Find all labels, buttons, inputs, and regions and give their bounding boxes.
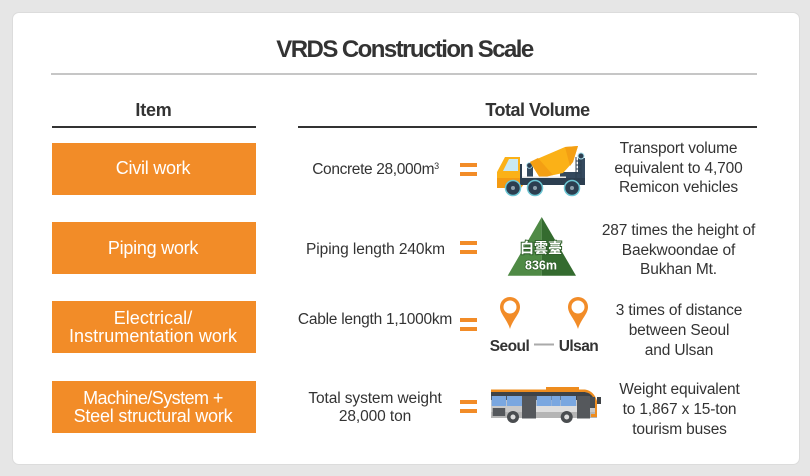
description: transport volume: [614, 140, 743, 196]
description: height of Baekwoondae: Bukhan Mt.: [640, 261, 717, 278]
item: piping work: [52, 222, 256, 274]
description: distance between Seoul and Ulsan: [616, 302, 742, 359]
description: distance between Seoul and Ulsan: between Seoul: [629, 322, 729, 339]
description: weight of buses: [619, 381, 740, 438]
description: transport volume: Remicon vehicles: [619, 179, 738, 196]
volume: cable length: Cable length 1,1000km: [298, 311, 452, 328]
icon: concrete mixer truck: [497, 146, 585, 196]
equals sign row 3: [460, 318, 477, 331]
volume: total system weight: Total system weight: [308, 390, 442, 407]
icon: tourism bus: [491, 387, 601, 423]
description: transport volume: Transport volume: [620, 140, 737, 157]
item: electrical and instrumentation work: [52, 301, 256, 353]
equals sign row 4: [460, 400, 477, 413]
description: weight of buses: Weight equivalent: [619, 381, 740, 398]
column heading: total volume: Total Volume: [485, 100, 590, 120]
volume: total system weight: 28,000 ton: [339, 408, 411, 425]
description: transport volume: equivalent to 4,700: [614, 160, 743, 177]
column heading: item: Item: [135, 100, 172, 120]
volume: concrete: Concrete 28,000m3: [312, 161, 439, 178]
description: distance between Seoul and Ulsan: and Ulsan: [645, 342, 713, 359]
equals sign row 1: [460, 163, 477, 176]
description: weight of buses: tourism buses: [632, 421, 727, 438]
icon: Baekwoondae mountain: [508, 217, 576, 276]
equals sign row 2: [460, 241, 477, 254]
item: civil work: [52, 143, 256, 195]
description: distance between Seoul and Ulsan: 3 times of distance: [616, 302, 742, 319]
item: civil work: Civil work: [116, 158, 190, 178]
icon: Seoul to Ulsan location pins: Seoul: [490, 338, 529, 355]
item: piping work: Piping work: [108, 238, 198, 258]
item: machine, system and steel structural work: [52, 381, 256, 433]
item: electrical and instrumentation work: Electrical/: [114, 308, 192, 328]
icon: Seoul to Ulsan location pins: Ulsan: [559, 338, 598, 355]
icon: Baekwoondae mountain: 白雲臺: [520, 240, 562, 256]
volume: total system weight: [308, 390, 442, 425]
title: VRDS Construction Scale: [276, 36, 533, 63]
volume: piping length: Piping length 240km: [306, 241, 445, 258]
item: electrical and instrumentation work: Instrumentation work: [69, 326, 237, 346]
description: height of Baekwoondae: Baekwoondae of: [622, 242, 735, 259]
icon: Baekwoondae mountain: 836m: [525, 258, 557, 272]
item: machine, system and steel structural work: Steel structural work: [74, 406, 232, 426]
icon: Seoul to Ulsan location pins: [490, 297, 598, 355]
description: weight of buses: to 1,867 x 15-ton: [623, 401, 736, 418]
description: height of Baekwoondae: 287 times the height of: [602, 222, 755, 239]
item: machine, system and steel structural work: Machine/System +: [83, 388, 223, 408]
description: height of Baekwoondae: [602, 222, 756, 278]
